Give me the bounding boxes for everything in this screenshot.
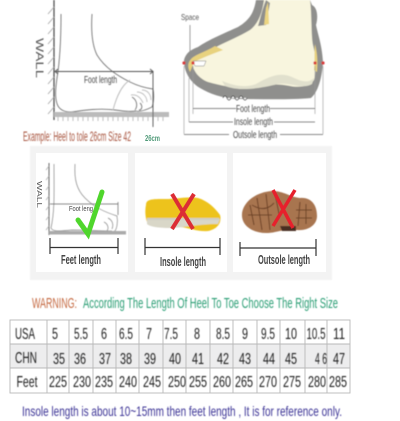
measurement: outsole length: Outsole length xyxy=(233,130,277,141)
row: USA: 6 xyxy=(101,326,107,343)
icon: red cross xyxy=(273,190,295,228)
label: feet length: Feet length xyxy=(61,252,101,267)
row: USA: USA xyxy=(15,326,35,343)
measurement: insole length xyxy=(189,117,315,128)
panel: foot in shoe cross-section xyxy=(181,0,325,141)
row: USA: 8.5 xyxy=(216,326,230,343)
row: CHN: 4 6 xyxy=(315,351,327,368)
row: USA: 11 xyxy=(333,326,345,343)
row: USA: 10.5 xyxy=(306,326,326,343)
label: outsole length: Outsole length xyxy=(258,252,310,267)
bracket: insole length xyxy=(145,238,220,255)
icon: yellow insole xyxy=(145,197,220,231)
icon: wall with hatching xyxy=(48,0,54,120)
row: Feet: 260 xyxy=(213,374,231,391)
card: outsole length xyxy=(233,153,326,272)
row: Feet: 250 xyxy=(168,374,186,391)
row: CHN: CHN xyxy=(15,350,37,367)
row: Feet xyxy=(16,374,347,391)
row: USA: 6.5 xyxy=(119,326,133,343)
measurement: outsole length xyxy=(184,130,323,141)
card: insole length xyxy=(135,153,227,272)
ground ruler xyxy=(54,112,169,121)
row: Feet: 255 xyxy=(189,374,207,391)
row: Feet: 245 xyxy=(143,374,161,391)
icon: green check xyxy=(78,192,102,234)
row: CHN: 41 xyxy=(192,351,204,368)
row: USA: 5 xyxy=(52,326,58,343)
row: CHN: 45 xyxy=(285,351,297,368)
row: Feet: 270 xyxy=(259,374,277,391)
row: CHN: 44 xyxy=(263,351,275,368)
measurement: foot length: Foot length xyxy=(236,104,270,115)
icon: brown outsole xyxy=(242,191,317,233)
caption: 26cm: 26cm xyxy=(145,134,160,143)
row: CHN: 36 xyxy=(74,351,86,368)
row: USA: 9.5 xyxy=(261,326,275,343)
label: wall: WALL xyxy=(33,38,45,78)
row: USA: 5.5 xyxy=(74,326,88,343)
row: USA: 10 xyxy=(285,326,297,343)
size table xyxy=(10,320,350,393)
row: CHN xyxy=(15,350,345,368)
row: Feet: 225 xyxy=(49,374,67,391)
row: CHN: 43 xyxy=(239,351,251,368)
row: CHN: 47 xyxy=(333,351,345,368)
warning label: WARNING: xyxy=(32,295,77,312)
icon: foot outline xyxy=(56,14,154,112)
row: Feet: 265 xyxy=(235,374,253,391)
icon: foot small xyxy=(46,163,126,235)
warning line xyxy=(32,295,338,312)
icon: shoe section xyxy=(182,0,325,100)
row: CHN: 38 xyxy=(120,351,132,368)
row: Feet: 280 xyxy=(308,374,326,391)
row: Feet: 240 xyxy=(119,374,137,391)
measurement: foot length xyxy=(184,66,323,134)
row: USA: 7 xyxy=(146,326,152,343)
row: Feet: 275 xyxy=(283,374,301,391)
row: Feet: 285 xyxy=(329,374,347,391)
row: CHN: 40 xyxy=(169,351,181,368)
row: CHN: 37 xyxy=(99,351,111,368)
example caption: Example: Heel to tole 26cm Size 42 xyxy=(23,129,131,144)
row: Feet: 235 xyxy=(95,374,113,391)
row: CHN: 35 xyxy=(53,351,65,368)
row: USA: 7.5 xyxy=(164,326,178,343)
bracket: feet length xyxy=(50,238,118,254)
row: USA xyxy=(15,326,345,343)
row: Feet: 230 xyxy=(73,374,91,391)
row: CHN: 39 xyxy=(144,351,156,368)
bracket: outsole length xyxy=(240,239,316,256)
arrow: foot length xyxy=(55,69,153,127)
row: CHN: 42 xyxy=(217,351,229,368)
card: feet length xyxy=(35,153,128,272)
row: Feet: Feet xyxy=(16,374,38,391)
label: insole length: Insole length xyxy=(160,254,206,269)
label: space: Space xyxy=(181,12,199,22)
measurement: insole length: Insole length xyxy=(234,117,273,128)
panel: foot against wall diagram xyxy=(33,0,169,127)
panel: comparison cards background xyxy=(30,146,332,280)
row: USA: 8 xyxy=(194,326,200,343)
row: USA: 9 xyxy=(242,326,248,343)
label: wall small: WALL xyxy=(35,181,44,208)
label: foot length small: Foot leng xyxy=(69,204,93,213)
icon: red cross xyxy=(172,194,194,229)
label: foot length: Foot length xyxy=(84,75,117,86)
